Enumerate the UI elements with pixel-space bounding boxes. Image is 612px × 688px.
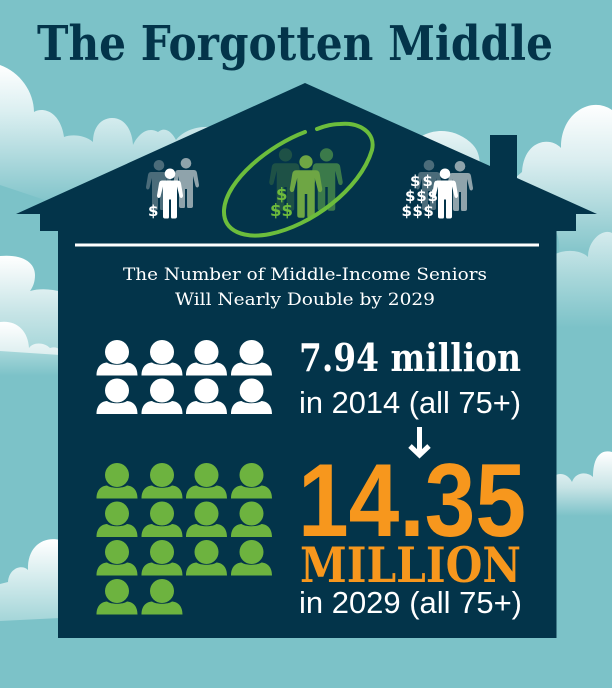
- statistic: 14.35: 14.35: [298, 443, 526, 559]
- pictogram: 2014 seniors (white): [96, 340, 272, 414]
- caption: in 2029: in 2029 (all 75+): [299, 585, 522, 620]
- subtitle: Will Nearly Double by 2029: [175, 290, 435, 310]
- title: The Forgotten Middle: [37, 16, 553, 72]
- icon: middle-income group circled: $$: [270, 201, 293, 220]
- subtitle: The Number of Middle-Income Seniors: [123, 265, 487, 285]
- icon: middle-income group circled: $: [276, 185, 287, 204]
- icon: high-income group: [402, 160, 473, 220]
- caption: in 2014: in 2014 (all 75+): [299, 385, 521, 420]
- icon: low-income group: [146, 158, 199, 220]
- icon: high-income group: $$$: [405, 187, 439, 205]
- icon: high-income group: $$$: [402, 202, 434, 220]
- icon: middle-income group circled: [224, 124, 373, 236]
- house: [16, 83, 597, 638]
- arrow: [410, 427, 429, 455]
- statistic: 7.94 million: 7.94 million: [299, 335, 521, 380]
- subtitle: [123, 265, 487, 310]
- icon: low-income group: $: [148, 202, 158, 220]
- pictogram: 2029 seniors (green): [96, 463, 272, 614]
- icon: high-income group: $$: [410, 172, 435, 190]
- statistic: MILLION: MILLION: [300, 536, 521, 594]
